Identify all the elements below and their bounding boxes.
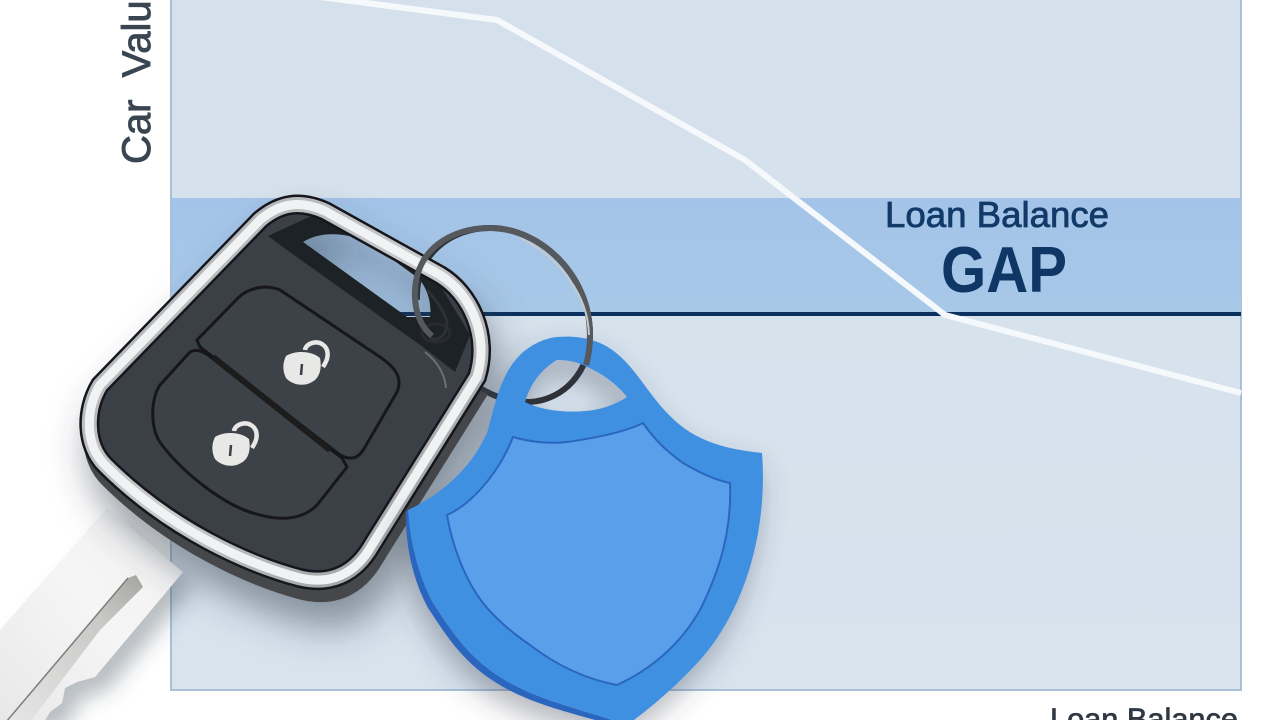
icon: key fob [89, 205, 481, 593]
loan balance line [172, 312, 1241, 316]
blade groove [6, 575, 143, 720]
fob eyelet [422, 324, 450, 342]
ring highlight [520, 238, 589, 335]
fob top dark zone [268, 212, 470, 372]
button: upper [197, 287, 399, 458]
icon: key ring front segment [415, 228, 590, 365]
button: lower [153, 350, 347, 518]
gap label: loan balance: Loan Balance [885, 194, 1109, 235]
fob chrome highlight [89, 205, 481, 580]
fob outer rim [92, 390, 480, 593]
icon: shield keychain [406, 337, 763, 720]
blade groove edge [6, 578, 128, 720]
icon: padlock upper [283, 342, 328, 385]
fob body with key hole [89, 205, 481, 580]
icon: key ring back [417, 228, 590, 402]
icon: key blade [0, 508, 183, 720]
icon: padlock lower [212, 423, 257, 466]
button separator slot [213, 357, 330, 450]
shield outer rim [408, 337, 763, 720]
fob inner shadow ring [89, 205, 481, 580]
shield inner panel [447, 423, 730, 685]
ring inner loop [427, 290, 447, 339]
fob chrome frame [89, 205, 481, 580]
gap label: GAP: GAP [941, 233, 1067, 306]
gap band [172, 198, 1241, 314]
fob lower ridges [425, 352, 446, 388]
shield bottom edge [406, 510, 627, 720]
car value depreciation line [320, 0, 1241, 393]
